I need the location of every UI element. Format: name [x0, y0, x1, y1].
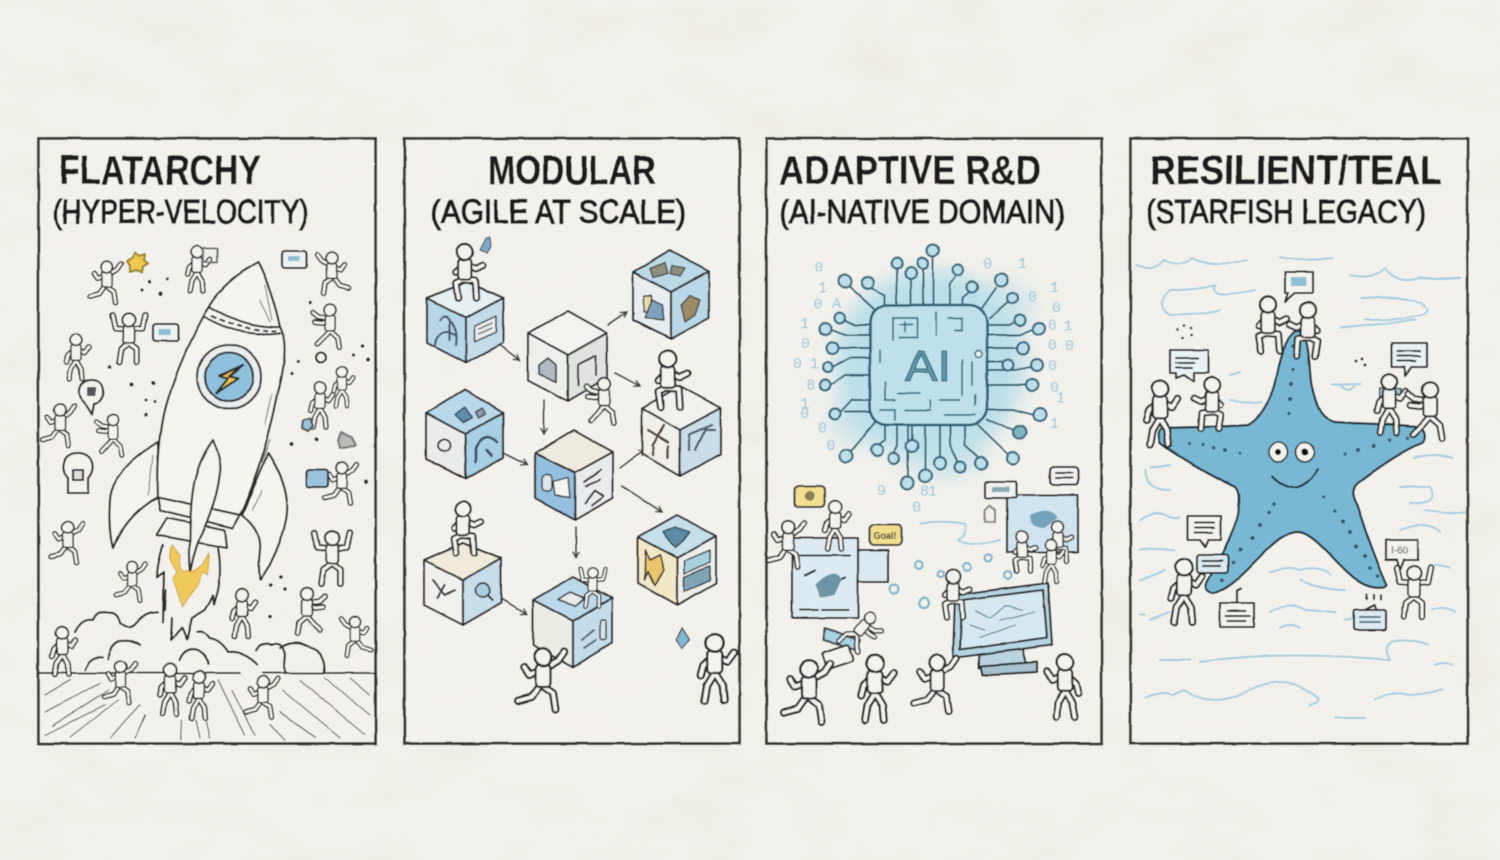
- cube A: [427, 282, 503, 363]
- binary digits: 0: [1048, 358, 1057, 375]
- binary digits: 0: [1052, 300, 1061, 317]
- binary digits: 0: [1065, 338, 1074, 355]
- props held by figures: [480, 237, 690, 648]
- cube G: [638, 515, 716, 605]
- rocket body: [158, 262, 285, 515]
- binary digits: 0: [815, 260, 824, 277]
- documents and speech bubbles left: [792, 486, 902, 670]
- binary digits: 1: [1050, 280, 1059, 297]
- light-blue data stream: [890, 522, 1012, 608]
- speech bubbles and cards: I-60: [1391, 546, 1409, 557]
- binary digits: 0: [800, 406, 809, 423]
- title: resilient/teal: RESILIENT/TEAL: [1150, 147, 1442, 193]
- binary digits: 9: [877, 483, 886, 500]
- binary digits: 1: [800, 396, 809, 413]
- subtitle: hyper-velocity: (HYPER-VELOCITY): [53, 193, 308, 230]
- binary digits: 0: [983, 256, 992, 273]
- rocket: [109, 262, 287, 580]
- starfish smile: [1272, 469, 1318, 487]
- cube H: [424, 543, 501, 625]
- cube F: [535, 430, 613, 520]
- binary digits: [793, 256, 1074, 517]
- binary digits: 1: [800, 316, 809, 333]
- circuit nodes: [819, 244, 1046, 490]
- porthole: [197, 345, 261, 409]
- binary digits: 1: [1056, 390, 1065, 407]
- binary digits: A: [832, 296, 841, 313]
- circuit traces: [831, 256, 1034, 477]
- monitor: [953, 583, 1052, 675]
- binary digits: 0: [1050, 380, 1059, 397]
- binary digits: 8: [806, 378, 815, 395]
- binary digits: 1: [1050, 416, 1059, 433]
- module arrows: [500, 312, 662, 614]
- rocket fins: [109, 442, 158, 548]
- cube D: [642, 386, 721, 476]
- panel: resilient/teal: [1130, 138, 1468, 744]
- title: modular: MODULAR: [488, 147, 656, 193]
- panel: adaptive R&D: [766, 138, 1102, 744]
- subtitle: ai-native domain: (AI-NATIVE DOMAIN): [779, 193, 1065, 230]
- ground with speed lines: [39, 673, 376, 740]
- binary digits: 0: [1048, 318, 1057, 335]
- rocket centre fin: [189, 440, 220, 573]
- binary digits: 1: [810, 356, 819, 373]
- binary digits: 0: [793, 356, 802, 373]
- binary digits: 1: [1018, 256, 1027, 273]
- collaboration board right: [985, 467, 1078, 552]
- subtitle: agile at scale: (AGILE AT SCALE): [431, 193, 686, 230]
- exhaust clouds: [75, 612, 325, 672]
- subtitle: starfish legacy: (STARFISH LEGACY): [1146, 193, 1426, 230]
- binary digits: 1: [818, 280, 827, 297]
- team figures on starfish: [1147, 297, 1442, 622]
- scattered dots: [108, 277, 370, 618]
- AI chip: [870, 305, 987, 425]
- rocket base: [158, 497, 240, 528]
- cube C: [528, 311, 607, 401]
- binary digits: 1: [1064, 318, 1073, 335]
- cube E: [426, 389, 503, 479]
- title: adaptive r&d: ADAPTIVE R&D: [779, 147, 1041, 193]
- binary digits: 0: [1048, 338, 1057, 355]
- bubble text: Goal!: [874, 531, 897, 541]
- icons and bubbles around rocket: [63, 248, 356, 493]
- title: flatarchy: FLATARCHY: [59, 147, 261, 193]
- water ripples: [1137, 257, 1465, 718]
- sparkles: [1177, 325, 1366, 366]
- binary digits: 0: [1028, 290, 1037, 307]
- binary digits: 0: [826, 438, 835, 455]
- team figures around rocket: [43, 246, 371, 718]
- binary digits: 0: [818, 420, 827, 437]
- team figures: [769, 501, 1078, 722]
- lightning bolt: [216, 365, 243, 393]
- binary digits: 1: [928, 484, 937, 501]
- cube B: [633, 250, 709, 339]
- binary digits: 0: [912, 500, 921, 517]
- panel: modular: [404, 138, 740, 744]
- starfish eyes: [1268, 442, 1314, 462]
- binary digits: 8: [920, 484, 929, 501]
- starfish: [1159, 330, 1425, 593]
- AI label: AI: [905, 342, 951, 391]
- team figures on cubes: [454, 244, 734, 709]
- binary digits: 0: [813, 296, 822, 313]
- binary digits: 0: [801, 336, 810, 353]
- speech bubbles and cards: [1170, 272, 1427, 630]
- panel: flatarchy: [38, 138, 376, 744]
- starfish spots: [1188, 344, 1410, 582]
- cube I: [533, 577, 612, 667]
- watercolour glow: [828, 270, 1035, 477]
- flame: [157, 545, 220, 640]
